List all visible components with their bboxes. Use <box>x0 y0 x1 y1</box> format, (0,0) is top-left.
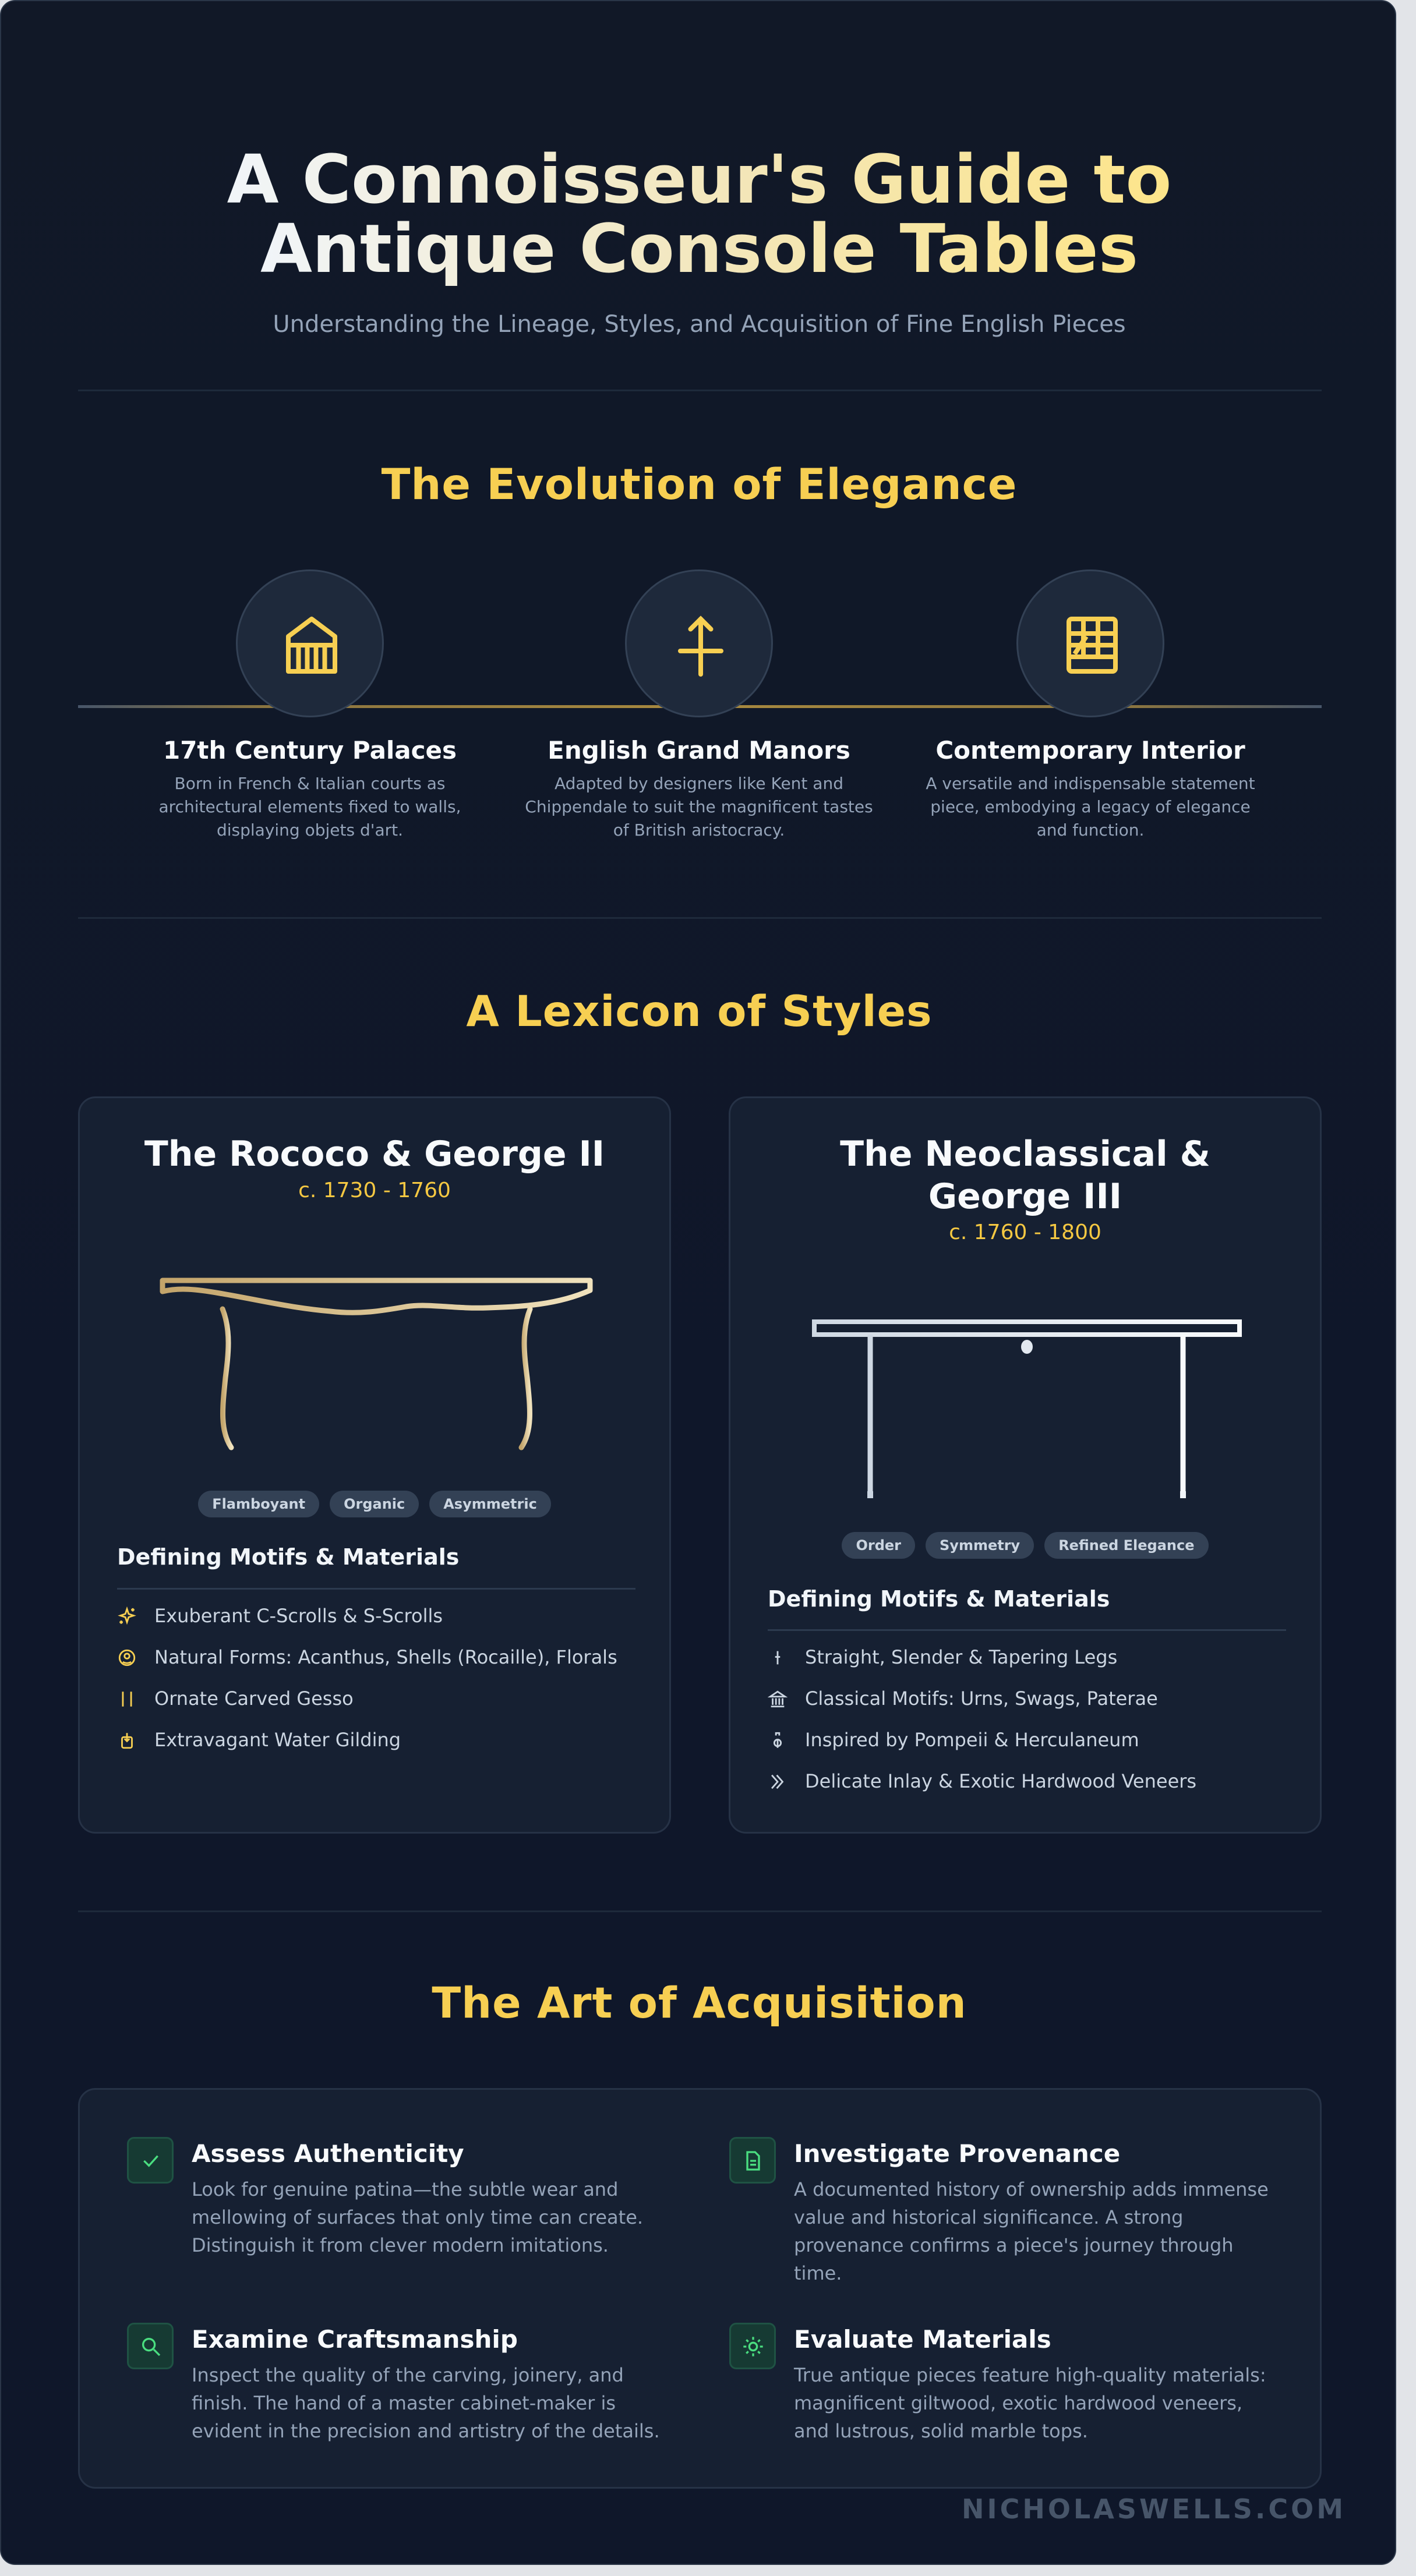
tags <box>842 1532 1209 1559</box>
item: materials <box>729 2323 1266 2442</box>
timeline item 3: Contemporary Interior <box>935 736 1245 765</box>
motif list: Exuberant C-Scrolls & S-Scrolls <box>154 1605 443 1627</box>
item: classical <box>768 1687 1158 1710</box>
motifs heading: Defining Motifs & Materials <box>117 1544 459 1570</box>
rococo table drawing <box>160 1278 593 1450</box>
item: provenance: A documented history of ownership adds immense value and historical significance. A strong provenance confirms a piece's journey through time. <box>794 2178 1269 2284</box>
card title <box>840 1134 1210 1217</box>
timeline item 2: Adapted by designers like Kent and Chippendale to suit the magnificent tastes of British aristocracy. <box>525 774 873 840</box>
item: authenticity <box>127 2137 643 2256</box>
timeline item 1: Born in French & Italian courts as architectural elements fixed to walls, displaying objets d'art. <box>159 774 461 840</box>
timeline item 1: 17th Century Palaces <box>163 736 457 765</box>
timeline item 3: A versatile and indispensable statement piece, embodying a legacy of elegance and function. <box>926 774 1255 840</box>
timeline line <box>78 705 1322 708</box>
motif list: Inspired by Pompeii & Herculaneum <box>805 1729 1139 1751</box>
icon: magnifier <box>127 2323 174 2369</box>
icon: document <box>729 2137 776 2184</box>
item: gesso <box>122 1687 354 1710</box>
heading: lexicon: A Lexicon of Styles <box>466 987 933 1036</box>
item: authenticity: Look for genuine patina—the subtle wear and mellowing of surfaces that only time can create. Distinguish it from clever modern imitations. <box>192 2178 643 2256</box>
title: Antique Console Tables <box>260 210 1138 288</box>
motif list <box>118 1605 617 1751</box>
footer brand: NICHOLASWELLS.COM <box>962 2493 1346 2525</box>
item: provenance: Investigate Provenance <box>794 2139 1120 2168</box>
icon: grid <box>1016 569 1164 717</box>
item: craftsmanship: Examine Craftsmanship <box>192 2325 518 2354</box>
motifs heading: Defining Motifs & Materials <box>768 1586 1110 1612</box>
tags: Organic <box>344 1496 405 1512</box>
icon: arrow <box>625 569 773 717</box>
title: A Connoisseur's Guide to <box>227 141 1171 219</box>
item: inlay <box>771 1770 1196 1792</box>
panel: acquisition <box>78 2088 1322 2489</box>
card title: The Rococo & George II <box>144 1134 605 1174</box>
motif list: Natural Forms: Acanthus, Shells (Rocaille), Florals <box>154 1646 617 1668</box>
motif list: Delicate Inlay & Exotic Hardwood Veneers <box>805 1770 1196 1792</box>
tags: Asymmetric <box>443 1496 537 1512</box>
icon: palace <box>236 569 384 717</box>
motif list: Extravagant Water Gilding <box>154 1729 401 1751</box>
panel: neoclassical <box>729 1096 1322 1834</box>
heading: evolution: The Evolution of Elegance <box>382 460 1017 509</box>
title <box>227 141 1171 288</box>
date: c. 1760 - 1800 <box>949 1220 1101 1244</box>
item: craftsmanship <box>127 2323 660 2442</box>
subtitle: Understanding the Lineage, Styles, and Acquisition of Fine English Pieces <box>273 311 1126 338</box>
card title: George III <box>928 1176 1122 1217</box>
motif list: Classical Motifs: Urns, Swags, Paterae <box>805 1687 1158 1710</box>
motif list: Ornate Carved Gesso <box>154 1687 354 1710</box>
item: materials: Evaluate Materials <box>794 2325 1051 2354</box>
card title: The Neoclassical & <box>840 1134 1210 1174</box>
date: c. 1730 - 1760 <box>298 1179 451 1202</box>
item: natural <box>119 1646 617 1668</box>
item: pompeii <box>774 1729 1139 1751</box>
neoclassical table drawing <box>812 1319 1242 1498</box>
tags <box>198 1491 551 1517</box>
tags: Order <box>856 1537 901 1554</box>
panel: rococo <box>78 1096 671 1834</box>
heading: acquisition: The Art of Acquisition <box>432 1979 967 2028</box>
item: provenance <box>729 2137 1269 2284</box>
timeline item 2: English Grand Manors <box>548 736 850 765</box>
timeline item 3 <box>926 736 1255 840</box>
icon: sun <box>729 2323 776 2369</box>
tags: Symmetry <box>940 1537 1020 1554</box>
item: legs <box>775 1646 1117 1668</box>
motif list: Straight, Slender & Tapering Legs <box>805 1646 1117 1668</box>
item: craftsmanship: Inspect the quality of the carving, joinery, and finish. The hand of a master cabinet-maker is evident in the precision and artistry of the details. <box>192 2364 660 2442</box>
item: gilding <box>121 1729 401 1751</box>
icon: check <box>127 2137 174 2184</box>
tags: Flamboyant <box>212 1496 305 1512</box>
item: scrolls <box>118 1605 443 1627</box>
item: materials: True antique pieces feature high-quality materials: magnificent giltwood, exotic hardwood veneers, and lustrous, solid marble tops. <box>794 2364 1266 2442</box>
motif list <box>768 1646 1196 1792</box>
timeline item 2 <box>525 736 873 840</box>
tags: Refined Elegance <box>1058 1537 1195 1554</box>
timeline item 1 <box>159 736 461 840</box>
item: authenticity: Assess Authenticity <box>192 2139 464 2168</box>
